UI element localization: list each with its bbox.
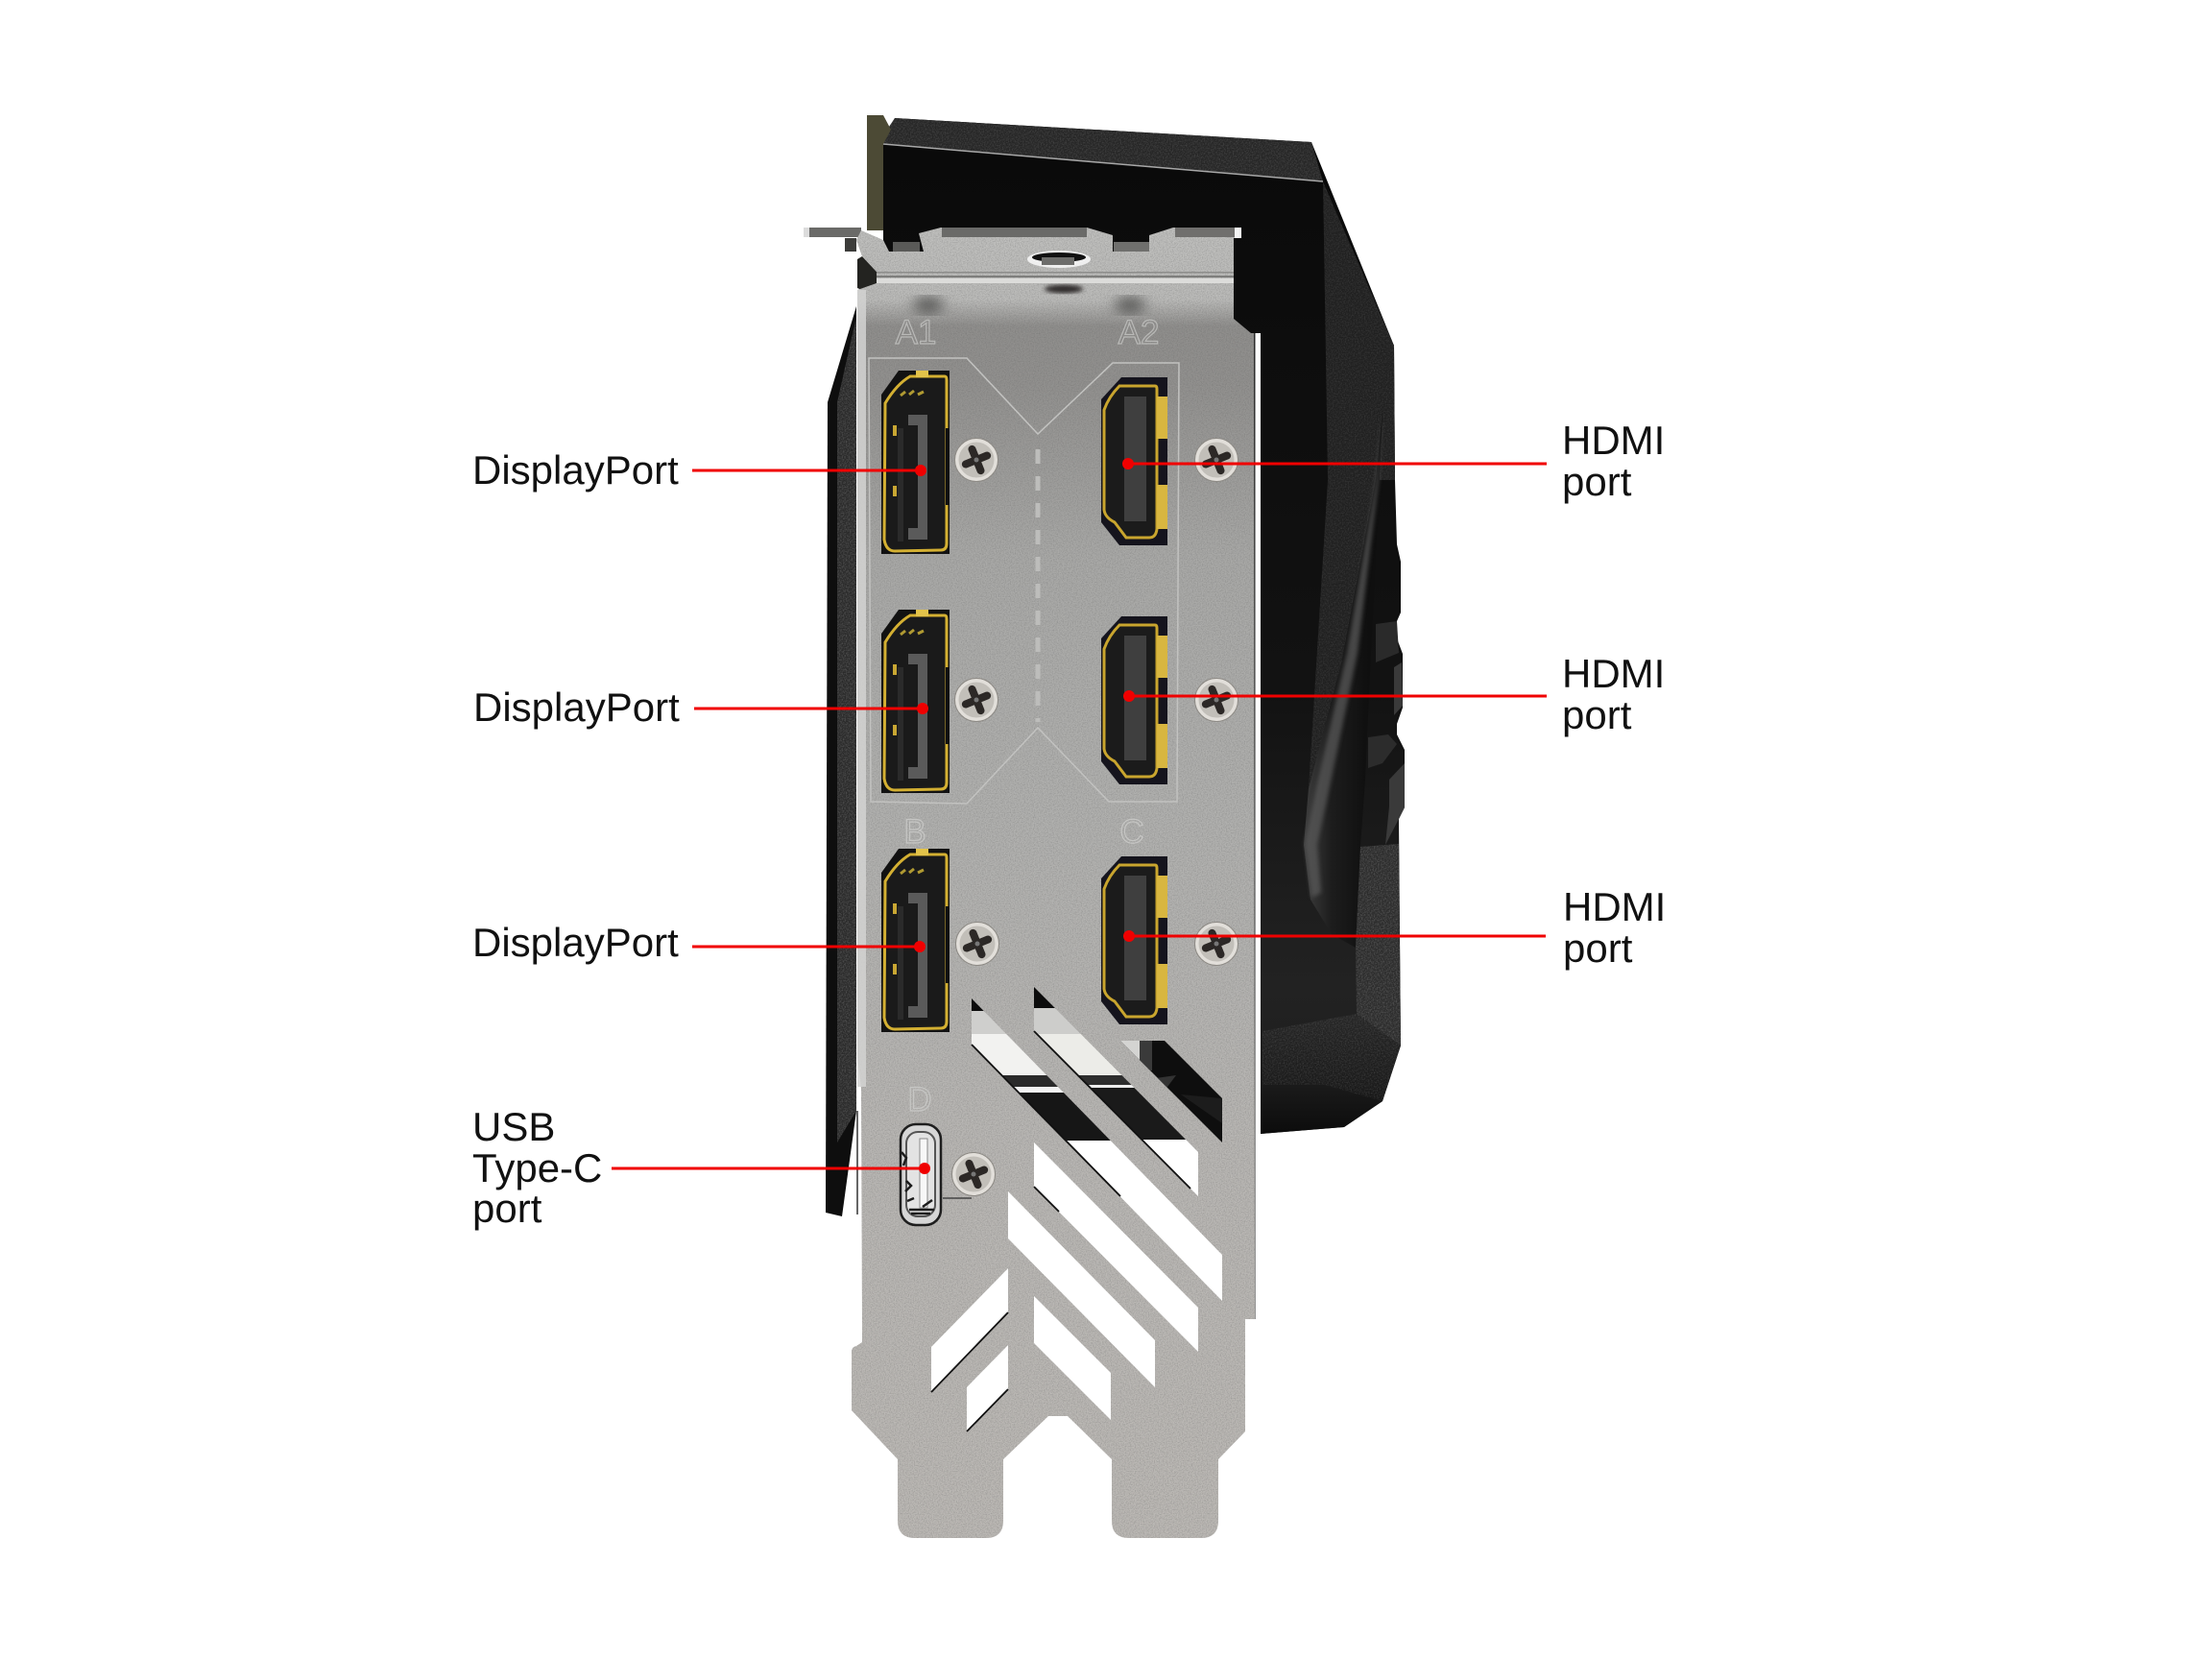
callout: HDMI port 1: port (1562, 459, 1632, 504)
screws (952, 438, 1238, 1196)
white gap beside bracket (1254, 333, 1261, 1134)
bracket texture (845, 221, 1258, 1546)
ventilation slots (931, 979, 1238, 1431)
callout: DisplayPort 3: DisplayPort (472, 920, 679, 965)
card top facet (883, 118, 1323, 181)
card bottom facet (1261, 1014, 1401, 1134)
card textured side band (1356, 844, 1401, 1046)
lower slot D (1034, 1142, 1198, 1352)
bracket top dark strips (942, 228, 1087, 237)
port letter B: B (903, 813, 926, 851)
bracket top-left tab (804, 228, 861, 237)
bronze plate (867, 115, 891, 230)
DisplayPort connector 2 (881, 610, 950, 793)
slot dark edges (931, 1031, 1190, 1431)
callout: HDMI port 2 (1123, 651, 1665, 737)
bracket left dark notch (857, 256, 877, 292)
bracket fold lines (877, 272, 1234, 283)
bracket plate (852, 228, 1255, 1538)
callout: USB Type-C port (472, 1104, 930, 1231)
callout: USB Type-C port: USB (472, 1104, 555, 1149)
card side step facets (1368, 621, 1405, 845)
port letter A2: A2 (1118, 314, 1159, 351)
blade highlight (1305, 410, 1382, 898)
bracket right edge (1254, 333, 1256, 1319)
port letter D: D (907, 1081, 932, 1118)
port letter A1: A1 (896, 314, 936, 351)
callout: HDMI port 3: port (1563, 926, 1633, 971)
callout: HDMI port 3 (1123, 884, 1666, 971)
mounting slot (1027, 251, 1091, 268)
callout: USB Type-C port: port (472, 1186, 542, 1231)
left chevron slot G (931, 1268, 1008, 1392)
left chevron slot H (967, 1345, 1008, 1431)
callout: DisplayPort 1 (472, 447, 926, 493)
callout: DisplayPort 2 (473, 685, 928, 730)
PCI bracket (804, 221, 1261, 1546)
graphics card body (826, 115, 1405, 1216)
DisplayPort connector 3 (881, 849, 950, 1032)
callout: HDMI port 2: port (1562, 692, 1632, 737)
slot shadow (1045, 284, 1083, 294)
left backplate (826, 306, 856, 1216)
HDMI connector 3 (1101, 856, 1167, 1024)
HDMI connector 1 (1101, 377, 1167, 545)
slot B (1034, 987, 1198, 1196)
callout: HDMI port 1: HDMI (1562, 418, 1665, 463)
callout: DisplayPort 1: DisplayPort (472, 447, 679, 493)
bracket shadows (913, 297, 1145, 314)
callout: HDMI port 3: HDMI (1563, 884, 1666, 929)
card right textured facet (1309, 181, 1395, 788)
embossed port area outline (869, 358, 1179, 804)
DisplayPort connector 1 (881, 371, 950, 554)
port letter C: C (1119, 813, 1144, 851)
USB Type-C connector (901, 1124, 972, 1225)
callout: DisplayPort 2: DisplayPort (473, 685, 680, 730)
callout: HDMI port 1 (1122, 418, 1665, 504)
card main shroud (883, 118, 1405, 1134)
HDMI connector 2 (1101, 616, 1167, 784)
slot A (972, 998, 1222, 1301)
lower slot E (1008, 1191, 1155, 1387)
callout: DisplayPort 3 (472, 920, 926, 965)
lower slot F (1034, 1296, 1111, 1420)
card blade (1304, 410, 1382, 948)
bracket left light edge (857, 290, 866, 1087)
embossed dashed line (1035, 449, 1041, 722)
callout: HDMI port 2: HDMI (1562, 651, 1665, 696)
callout: USB Type-C port: Type-C (472, 1145, 602, 1190)
slot C (1120, 1041, 1222, 1142)
